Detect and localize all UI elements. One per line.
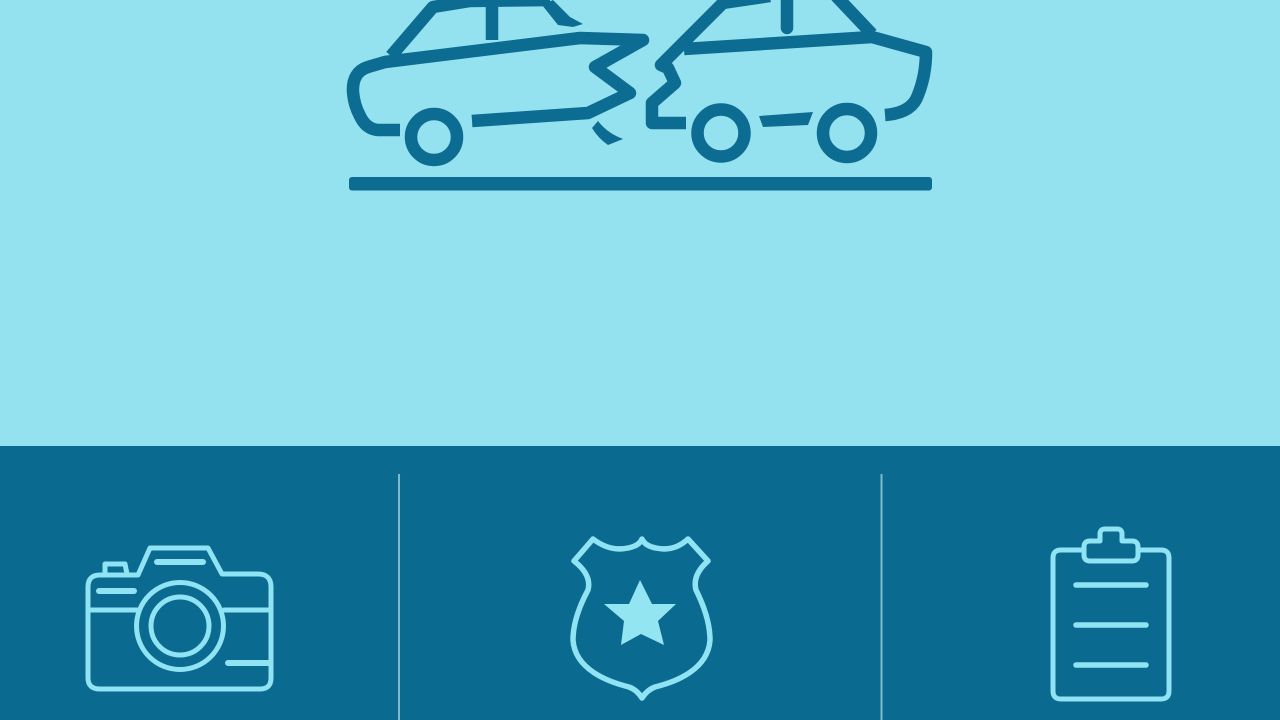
left car roof and windows xyxy=(391,0,550,56)
panel: dark lower band xyxy=(0,446,1280,720)
icon: clipboard xyxy=(1053,529,1169,699)
divider left xyxy=(398,474,400,720)
right car sill xyxy=(759,112,813,127)
right car rear wheel xyxy=(823,109,871,157)
icon: police badge xyxy=(573,539,710,698)
right car beltline and hood xyxy=(684,37,926,115)
panel: light upper background xyxy=(0,0,1280,446)
divider right xyxy=(880,474,882,720)
left car wheel xyxy=(411,114,457,160)
icon: camera xyxy=(88,548,271,689)
right car front wheel xyxy=(698,110,744,156)
left car pillar xyxy=(486,0,498,40)
right car center pillar xyxy=(781,0,793,28)
left car body xyxy=(353,38,643,130)
ground line xyxy=(349,177,932,190)
crash debris xyxy=(592,121,623,145)
icon: car crash xyxy=(353,0,926,160)
left car roof tail xyxy=(542,0,583,27)
right car front crumple xyxy=(652,0,770,123)
right car roof pillar xyxy=(836,0,872,34)
